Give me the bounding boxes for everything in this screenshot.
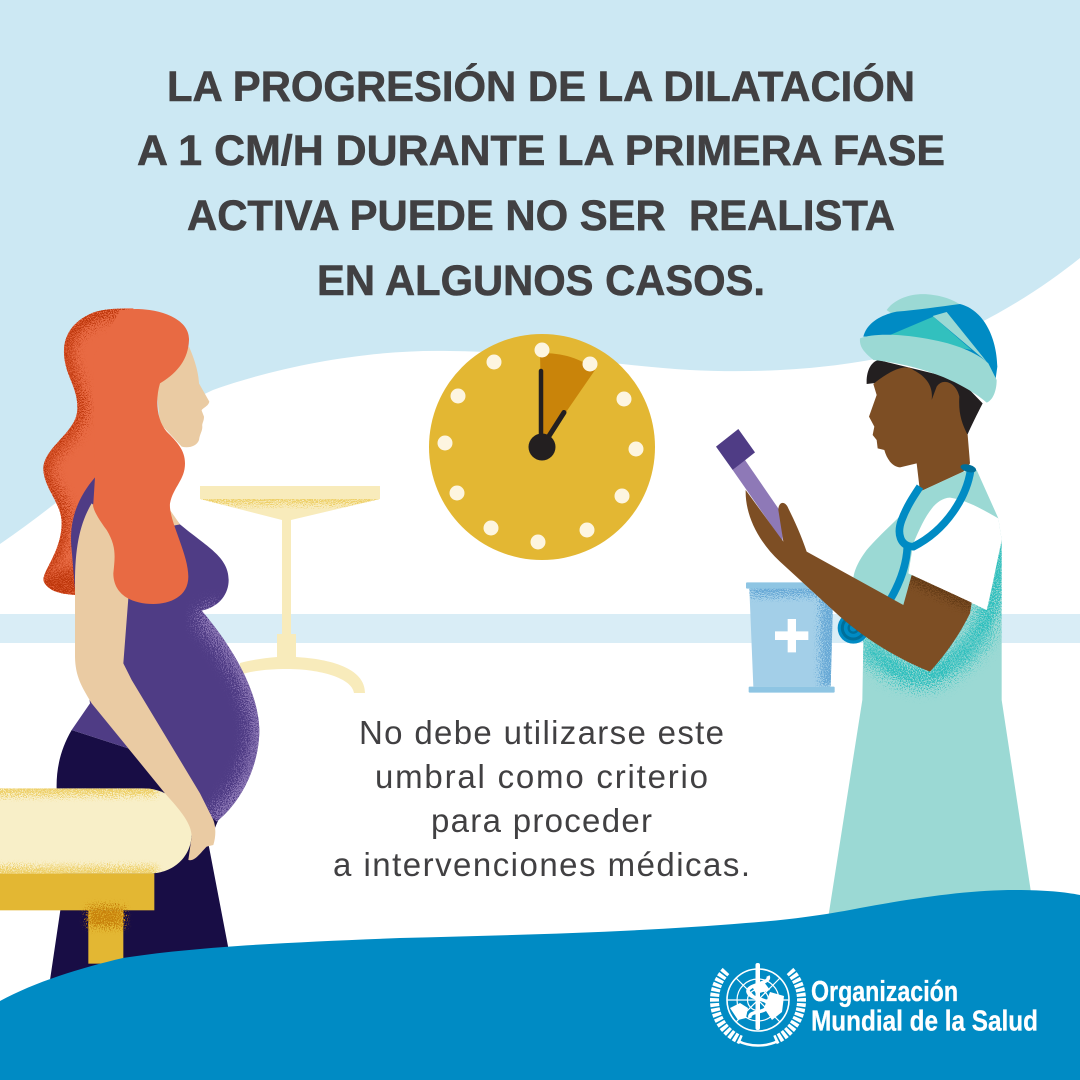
table padding	[0, 788, 192, 874]
clock hands	[528, 371, 564, 460]
turban back	[887, 294, 963, 320]
skirt	[50, 730, 230, 980]
arm and hand	[746, 490, 973, 672]
neck	[170, 510, 180, 526]
one-hour wedge	[540, 353, 595, 447]
organisation name: Organización	[811, 976, 958, 1008]
table base	[0, 873, 154, 910]
dress top	[71, 477, 262, 825]
hair	[867, 360, 983, 435]
arm	[75, 503, 215, 860]
medical bin with cross	[746, 582, 837, 693]
nurse	[716, 294, 1032, 917]
exam table	[0, 783, 192, 964]
dress	[828, 470, 1032, 917]
background: light blue top shape	[0, 0, 1080, 544]
title	[137, 62, 945, 305]
back hair	[40, 307, 133, 600]
clock face	[429, 334, 655, 560]
side table	[200, 486, 380, 693]
test tube	[716, 429, 783, 542]
title: EN ALGUNOS CASOS.	[317, 257, 765, 305]
stethoscope	[838, 463, 977, 644]
hour markers	[438, 342, 644, 550]
pregnant woman	[0, 307, 262, 980]
body text: umbral como criterio	[375, 758, 708, 795]
body text	[333, 714, 750, 883]
table leg	[88, 907, 123, 964]
organisation name	[811, 976, 1038, 1038]
title: ACTIVA PUEDE NO SER REALISTA	[187, 192, 895, 240]
clock	[429, 334, 655, 560]
turban	[860, 304, 997, 403]
head and neck	[869, 367, 970, 492]
title: LA PROGRESIÓN DE LA DILATACIÓN	[167, 62, 915, 111]
white sleeve	[908, 498, 1002, 610]
organisation name: Mundial de la Salud	[811, 1006, 1038, 1038]
title: A 1 CM/H DURANTE LA PRIMERA FASE	[137, 127, 945, 175]
body text: a intervenciones médicas.	[333, 846, 750, 883]
WHO emblem	[714, 963, 802, 1046]
body text: para proceder	[431, 802, 652, 839]
face	[157, 347, 209, 447]
WHO logo	[714, 963, 1038, 1046]
front hair	[93, 309, 189, 604]
body text: No debe utilizarse este	[359, 714, 724, 751]
background: pale blue horizontal band	[0, 614, 1080, 643]
bottom blue wave	[0, 890, 1080, 1080]
